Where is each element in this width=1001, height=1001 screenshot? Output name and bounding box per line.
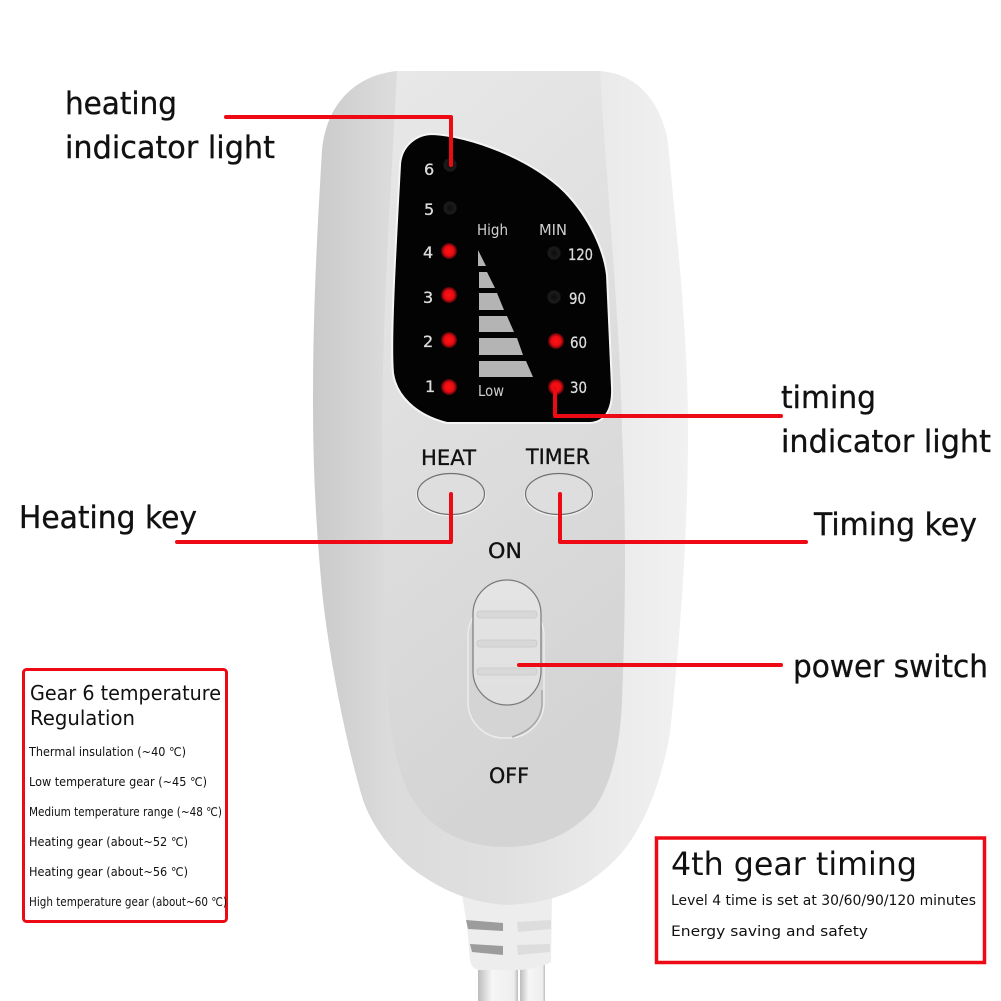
callout lines — [177, 117, 806, 665]
heat level numbers: 1 — [425, 377, 435, 396]
panel labels: 60 — [570, 333, 587, 352]
label: heating indicator light: heating — [65, 86, 177, 122]
panel labels: 90 — [569, 289, 586, 308]
panel: gear 6 temperature regulation: Medium temperature range (~48 ℃) — [29, 805, 222, 819]
panel labels: 30 — [570, 378, 587, 397]
heat level numbers: 2 — [423, 332, 433, 351]
heat button — [416, 474, 486, 516]
panel labels: 120 — [568, 245, 593, 264]
panel: gear 6 temperature regulation — [24, 670, 227, 922]
button labels: ON — [488, 539, 522, 563]
panel: gear 6 temperature regulation: Heating gear (about~52 ℃) — [29, 835, 188, 849]
heat level numbers: 3 — [423, 288, 433, 307]
panel labels: High — [477, 221, 508, 239]
panel: gear 6 temperature regulation: High temperature gear (about~60 ℃) — [29, 895, 227, 909]
panel: 4th gear timing: Energy saving and safety — [671, 924, 868, 940]
timer indicator lights — [547, 246, 564, 395]
panel: gear 6 temperature regulation: Regulation — [30, 706, 135, 730]
label: heating indicator light: indicator light — [65, 130, 275, 166]
panel: gear 6 temperature regulation: Thermal insulation (~40 ℃) — [28, 745, 186, 759]
panel: gear 6 temperature regulation: Heating gear (about~56 ℃) — [29, 865, 188, 879]
timer button — [524, 474, 594, 516]
heat level numbers: 6 — [424, 160, 434, 179]
level wedge — [478, 250, 533, 377]
power switch — [468, 580, 544, 738]
label: heating indicator light — [65, 86, 275, 166]
button labels: TIMER — [525, 445, 590, 469]
button labels: OFF — [489, 764, 529, 788]
label: heating key: Heating key — [19, 500, 197, 536]
panel: 4th gear timing: Level 4 time is set at 30/60/90/120 minutes — [671, 893, 976, 909]
heat level numbers: 4 — [423, 243, 433, 262]
panel labels — [477, 221, 593, 400]
heat level numbers: 5 — [424, 200, 434, 219]
label: power switch: power switch — [793, 649, 988, 685]
label: timing indicator light: timing — [781, 380, 876, 416]
remote front face — [382, 71, 625, 847]
remote body — [313, 71, 688, 905]
power cord and strain relief — [462, 895, 552, 1001]
display panel — [392, 134, 612, 423]
panel: 4th gear timing — [656, 838, 984, 962]
panel labels: Low — [478, 382, 504, 400]
heat indicator lights — [441, 158, 457, 395]
button labels: HEAT — [421, 446, 476, 470]
panel: gear 6 temperature regulation: Gear 6 temperature — [30, 681, 221, 705]
panel: gear 6 temperature regulation: Low temperature gear (~45 ℃) — [29, 775, 207, 789]
label: timing indicator light: indicator light — [781, 424, 991, 460]
button labels — [421, 445, 590, 788]
heat level numbers — [423, 160, 435, 396]
label: timing indicator light — [781, 380, 991, 460]
label: timing key: Timing key — [813, 507, 977, 543]
panel labels: MIN — [539, 221, 567, 239]
panel: 4th gear timing: 4th gear timing — [671, 845, 917, 883]
